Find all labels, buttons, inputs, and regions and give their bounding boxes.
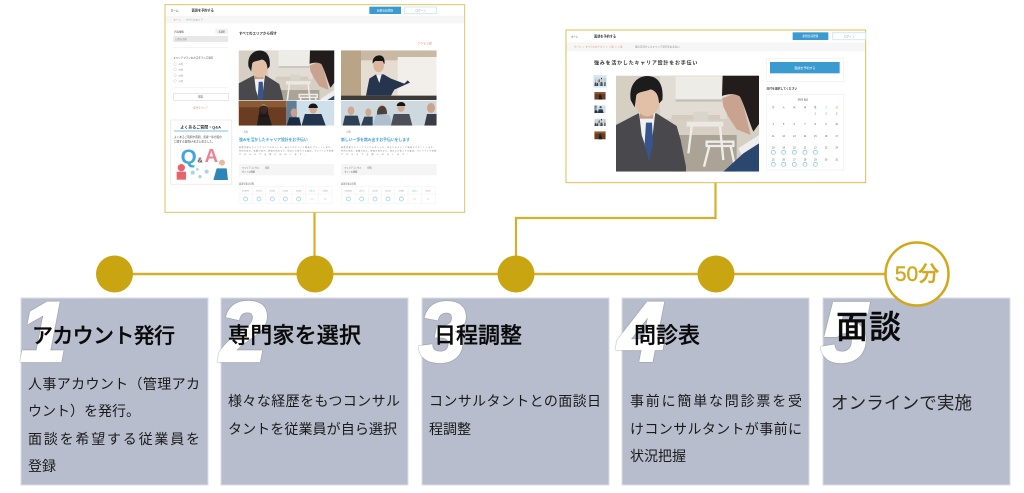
panel: screenshot expert list: 性別の悩み、転職の悩み、家庭の悩みなど、悩みにお答えする面談。オンラインで実施 bbox=[341, 149, 436, 153]
step number 3: 3 bbox=[419, 285, 466, 379]
panel: screenshot expert list: タントの経験 bbox=[344, 169, 358, 173]
panel: screenshot expert list: 大阪 bbox=[346, 129, 351, 133]
timeline marker 3 bbox=[498, 256, 534, 292]
panel: screenshot expert list: よくあるご質問・Q&A bbox=[180, 123, 221, 129]
step 2 heading: 専門家を選択 bbox=[228, 323, 361, 348]
panel: screenshot booking page: 水 bbox=[793, 105, 796, 109]
step 1 description: 面談を希望する従業員を bbox=[28, 431, 200, 447]
panel: screenshot booking page: 15 bbox=[814, 136, 817, 138]
panel: screenshot expert list: 新規会員登録 bbox=[377, 8, 393, 12]
panel: screenshot booking page: 5 bbox=[783, 124, 785, 126]
panel: screenshot expert list bbox=[165, 5, 465, 212]
panel: screenshot booking page: 16 bbox=[825, 136, 828, 138]
panel: screenshot booking page: 19 bbox=[782, 148, 786, 150]
panel: screenshot expert list: 大阪 bbox=[243, 129, 249, 133]
panel: screenshot booking page: 火 bbox=[782, 105, 785, 109]
panel: screenshot expert list: キャリアコンサル bbox=[242, 166, 260, 170]
connector: screen 1 to step 2 bbox=[313, 212, 316, 262]
panel: screenshot booking page: 6 bbox=[794, 124, 796, 126]
panel: screenshot expert list: 20(水) bbox=[372, 188, 378, 192]
timeline marker 2 bbox=[296, 256, 334, 292]
panel: screenshot booking page: 12 bbox=[782, 136, 786, 138]
panel: screenshot expert list: 検索 bbox=[198, 95, 204, 99]
panel: screenshot booking page: 26 bbox=[782, 159, 786, 161]
panel: screenshot expert list: 19(火) bbox=[359, 189, 365, 192]
panel: screenshot expert list: 19(火) bbox=[256, 189, 262, 192]
panel: screenshot booking page: 木 bbox=[804, 105, 807, 109]
panel: screenshot booking page: 金 bbox=[814, 105, 817, 109]
panel: screenshot expert list: 性別の悩み、転職の悩み、家庭の悩みなど、悩みにお答えする面談。オンラインで実施 bbox=[239, 149, 333, 153]
panel: screenshot booking page: ホーム bbox=[571, 34, 579, 38]
panel: screenshot expert list: 50代 bbox=[178, 79, 184, 83]
step 1 description: 人事アカウント（管理アカ bbox=[28, 376, 200, 392]
panel: screenshot expert list: できるので全国に対応します。 bbox=[341, 152, 409, 156]
panel: screenshot expert list: ログイン bbox=[415, 8, 426, 12]
panel: screenshot booking page: ホーム ＞ すべてのカテゴリ ＞ 人事 ＞ 人事 bbox=[574, 45, 623, 49]
panel: screenshot booking page: 11 bbox=[772, 136, 775, 138]
panel: screenshot booking page: 3 bbox=[836, 114, 838, 116]
panel: screenshot expert list: できるので全国に対応します。 bbox=[239, 152, 306, 156]
step 4 description bbox=[630, 393, 802, 464]
panel: screenshot booking page: 31 bbox=[835, 159, 839, 161]
step 4 description: 状況把握 bbox=[630, 448, 686, 464]
panel: step 1 bbox=[20, 285, 208, 485]
panel: screenshot expert list: 22(金) bbox=[296, 188, 302, 192]
panel: screenshot booking page: 8 bbox=[815, 124, 817, 126]
panel: screenshot booking page: 土 bbox=[825, 105, 828, 109]
panel: screenshot expert list: 面談可能な日程 bbox=[341, 181, 357, 185]
panel: screenshot booking page: 29 bbox=[814, 159, 817, 161]
panel: screenshot expert list: 日程を選択 bbox=[175, 37, 188, 41]
panel: screenshot expert list: 面談可能な日程 bbox=[239, 181, 255, 185]
panel: screenshot expert list: ホーム bbox=[173, 18, 181, 22]
panel: screenshot expert list: キャリアコンサル bbox=[344, 166, 362, 170]
step 4 description: けコンサルタントが事前に bbox=[630, 421, 802, 437]
panel: screenshot booking page: 24 bbox=[835, 148, 839, 150]
panel: screenshot booking page: ログイン bbox=[844, 34, 855, 38]
connector: screen 2 to step 3 bbox=[516, 183, 716, 262]
panel: screenshot expert list: 20(水) bbox=[270, 188, 275, 192]
step number 4: 4 bbox=[616, 285, 665, 379]
panel: screenshot expert list: すべてのエリアから探す bbox=[239, 31, 277, 36]
panel: screenshot booking page bbox=[566, 30, 866, 183]
panel: screenshot expert list: 未選択 bbox=[218, 29, 226, 33]
panel: screenshot booking page: 強みを活かしたキャリア設計をお手伝い bbox=[594, 60, 697, 67]
panel: screenshot booking page: 面談を予約する bbox=[795, 65, 815, 70]
panel: screenshot expert list: Q bbox=[181, 145, 197, 168]
panel: screenshot booking page: 2 bbox=[825, 114, 827, 116]
panel: screenshot expert list: 40代 bbox=[178, 73, 184, 77]
panel: screenshot expert list: タントの経験 bbox=[242, 169, 256, 173]
panel: screenshot expert list: 6/18(月) bbox=[242, 188, 250, 192]
timeline marker 1 bbox=[96, 256, 133, 292]
panel: screenshot booking page: 日付を選択してください bbox=[766, 86, 797, 90]
panel: screenshot expert list: 23(土) bbox=[309, 188, 315, 192]
duration badge: 50分: 50分 bbox=[895, 263, 939, 286]
step 3 description bbox=[429, 393, 601, 437]
panel: step 3 bbox=[419, 285, 609, 485]
step 1 description: ウント）を発行。 bbox=[28, 403, 140, 419]
panel: step 2 bbox=[218, 285, 408, 485]
panel: screenshot booking page: 17 bbox=[835, 136, 839, 138]
panel: screenshot expert list: 30代 bbox=[178, 68, 184, 72]
panel: screenshot booking page: 18 bbox=[772, 148, 775, 150]
panel: screenshot expert list: 内容検索 bbox=[174, 29, 184, 33]
panel: screenshot booking page: 20 bbox=[793, 148, 796, 150]
panel: step 4 bbox=[616, 285, 809, 485]
panel: screenshot booking page: 23 bbox=[825, 148, 828, 150]
panel: screenshot booking page: 14 bbox=[804, 136, 807, 138]
step number 2: 2 bbox=[218, 285, 267, 379]
step 3 description: コンサルタントとの面談日 bbox=[429, 393, 601, 409]
panel: screenshot booking page: 2021 6月 bbox=[798, 97, 808, 101]
panel: screenshot booking page: 月 bbox=[772, 105, 775, 109]
timeline marker 4 bbox=[698, 256, 734, 292]
step 4 heading: 問診表 bbox=[634, 323, 700, 348]
panel: screenshot expert list: キャリアプランのカスタマイズ項目 bbox=[173, 55, 214, 59]
panel: screenshot expert list: 6/18(月) bbox=[345, 188, 352, 192]
panel: screenshot booking page: 面談を予約する bbox=[594, 33, 616, 38]
panel: screenshot booking page: 日 bbox=[835, 106, 838, 109]
panel: screenshot expert list: 条件をクリア bbox=[193, 106, 209, 110]
panel: screenshot expert list: すべてのエリア bbox=[186, 18, 204, 22]
panel: screenshot booking page: 強みを活かしたキャリア設計をお手伝い bbox=[635, 45, 680, 49]
panel: screenshot booking page: 22 bbox=[814, 148, 817, 150]
panel: screenshot expert list: & bbox=[197, 156, 203, 165]
panel: screenshot booking page: 1 bbox=[815, 114, 817, 116]
panel: screenshot expert list: に関する質問&Aをまとめました。 bbox=[174, 140, 215, 144]
step 1 description: 登録 bbox=[28, 458, 56, 474]
panel: screenshot expert list: よくあるご質問や質問、皆様一年の質の bbox=[174, 135, 222, 139]
panel: screenshot expert list: 伊賀 bbox=[367, 166, 372, 170]
step 4 description: 事前に簡単な問診票を受 bbox=[630, 393, 802, 409]
step 2 description: 様々な経歴をもつコンサル bbox=[228, 393, 400, 409]
panel: screenshot booking page: 10 bbox=[835, 124, 839, 126]
step number 5: 5 bbox=[821, 285, 869, 379]
panel: screenshot booking page: 9 bbox=[825, 124, 827, 126]
panel: screenshot expert list: ホーム bbox=[171, 9, 179, 13]
connector: timeline line bbox=[114, 273, 900, 275]
panel: screenshot expert list: A bbox=[205, 145, 218, 166]
panel: screenshot expert list: 強みを活かしたキャリア設計をお手伝い bbox=[239, 137, 308, 142]
panel: screenshot booking page: 30 bbox=[825, 159, 828, 161]
panel: screenshot booking page: 21 bbox=[804, 148, 807, 150]
panel: screenshot booking page: 新規会員登録 bbox=[802, 34, 819, 38]
step 5 heading: 面談 bbox=[836, 309, 901, 345]
panel: screenshot booking page: 28 bbox=[804, 159, 807, 161]
panel: screenshot expert list: 20代 bbox=[178, 62, 184, 66]
panel: screenshot expert list: 新しい一歩を踏み出すお手伝いをします bbox=[341, 137, 410, 142]
panel: screenshot expert list: 経歴豊富なキャリアコンサルタントが、あなたのキャリア開発をサポートします。 bbox=[239, 145, 332, 149]
panel: screenshot booking page: 27 bbox=[793, 159, 796, 161]
panel: step 5 bbox=[821, 285, 1010, 485]
step 1 description bbox=[28, 376, 200, 474]
panel: screenshot expert list: 23(土) bbox=[412, 188, 418, 192]
step 1 heading: アカウント発行 bbox=[32, 325, 175, 348]
panel: screenshot booking page: 4 bbox=[773, 124, 775, 126]
step 3 description: 程調整 bbox=[429, 421, 471, 437]
panel: screenshot expert list: 24(日) bbox=[425, 189, 431, 192]
step 2 description: タントを従業員が自ら選択 bbox=[228, 421, 397, 437]
panel: screenshot expert list: 経歴豊富なキャリアコンサルタントが、あなたのキャリア開発をサポートします。 bbox=[341, 145, 435, 149]
panel: screenshot expert list: 21(木) bbox=[283, 188, 288, 192]
panel: screenshot booking page: 13 bbox=[793, 136, 796, 138]
step 5 description: オンラインで実施 bbox=[831, 393, 972, 413]
duration badge: 50分 bbox=[886, 242, 948, 306]
panel: screenshot booking page: 7 bbox=[804, 124, 806, 126]
panel: screenshot expert list: 宮西 bbox=[265, 166, 270, 170]
step 2 description bbox=[228, 393, 400, 437]
panel: screenshot expert list: 面談を予約する bbox=[192, 8, 214, 13]
panel: screenshot expert list: 24(日) bbox=[323, 189, 328, 192]
panel: screenshot expert list: 21(木) bbox=[385, 188, 391, 192]
step 3 heading: 日程調整 bbox=[434, 323, 522, 348]
step number 1: 1 bbox=[20, 285, 67, 379]
panel: screenshot booking page: 25 bbox=[772, 159, 775, 161]
panel: screenshot expert list: 22(金) bbox=[399, 188, 404, 192]
panel: screenshot expert list: アクセス順 bbox=[418, 41, 432, 45]
